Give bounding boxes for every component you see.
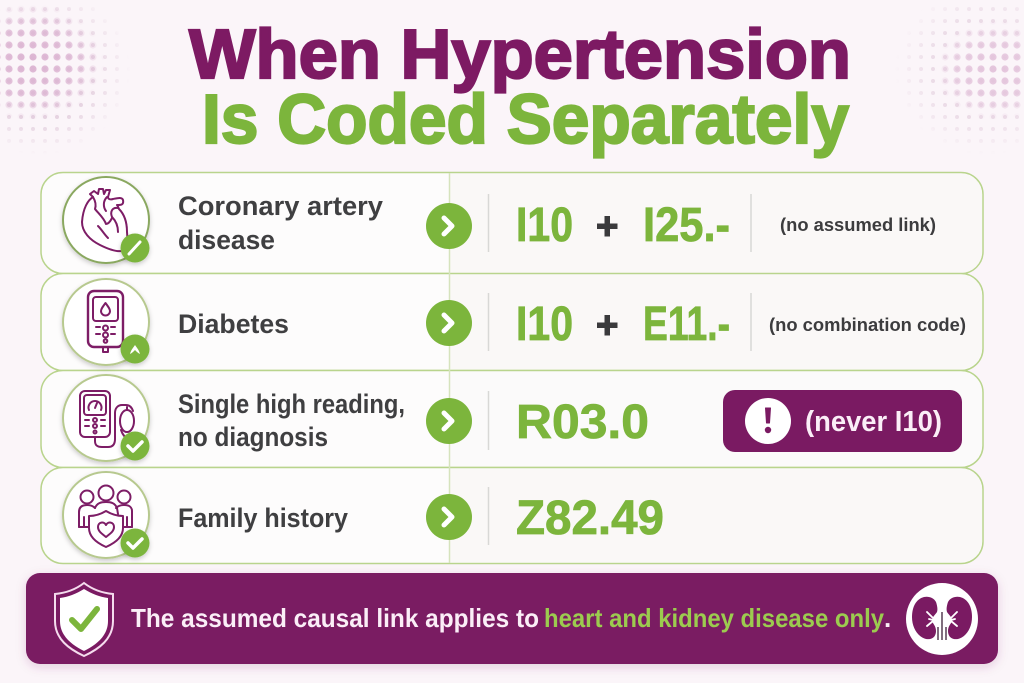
code: R03.0 bbox=[516, 396, 649, 449]
codes: I25.- bbox=[643, 199, 730, 252]
icon: shield check bbox=[55, 583, 113, 656]
title bbox=[189, 15, 851, 158]
title: Is Coded Separately bbox=[202, 80, 849, 158]
plus signs bbox=[597, 216, 618, 336]
arrow: row 2 bbox=[426, 300, 472, 346]
takeaway text: . bbox=[884, 603, 891, 633]
codes: I10 bbox=[516, 199, 573, 252]
note: (no combination code) bbox=[769, 314, 966, 335]
icon: heart bbox=[63, 177, 150, 263]
icon: glucose meter bbox=[63, 279, 150, 365]
label: disease bbox=[178, 225, 275, 255]
arrow: row 3 bbox=[426, 398, 472, 444]
row: coronary artery disease bbox=[41, 172, 983, 274]
code: Z82.49 bbox=[516, 492, 664, 545]
label: Coronary artery bbox=[178, 191, 383, 221]
callout: never I10: (never I10) bbox=[805, 406, 942, 438]
icon: kidneys bbox=[906, 583, 978, 655]
codes: I10 bbox=[516, 298, 573, 351]
panel: code table bbox=[41, 172, 983, 564]
column dividers bbox=[450, 173, 751, 563]
title: When Hypertension bbox=[189, 15, 851, 93]
arrow: row 1 bbox=[426, 203, 472, 249]
codes: E11.- bbox=[643, 298, 730, 351]
label: Single high reading, bbox=[178, 389, 405, 419]
icon: family with shield bbox=[63, 472, 150, 558]
banner: key takeaway bbox=[26, 573, 998, 664]
label: no diagnosis bbox=[178, 422, 328, 452]
arrow: row 4 bbox=[426, 494, 472, 540]
label: Diabetes bbox=[178, 309, 289, 339]
row: diabetes bbox=[41, 274, 983, 370]
row: family history bbox=[41, 468, 983, 564]
takeaway text: The assumed causal link applies to bbox=[131, 603, 539, 633]
icon: blood pressure monitor bbox=[63, 375, 150, 461]
label: Family history bbox=[178, 503, 348, 533]
halftone dots: top right bbox=[908, 7, 1020, 143]
note: (no assumed link) bbox=[780, 214, 936, 235]
halftone dots: top left bbox=[0, 7, 119, 143]
callout: never I10 bbox=[723, 390, 962, 452]
row: single high reading bbox=[41, 370, 983, 468]
takeaway text: heart and kidney disease only bbox=[544, 603, 884, 633]
